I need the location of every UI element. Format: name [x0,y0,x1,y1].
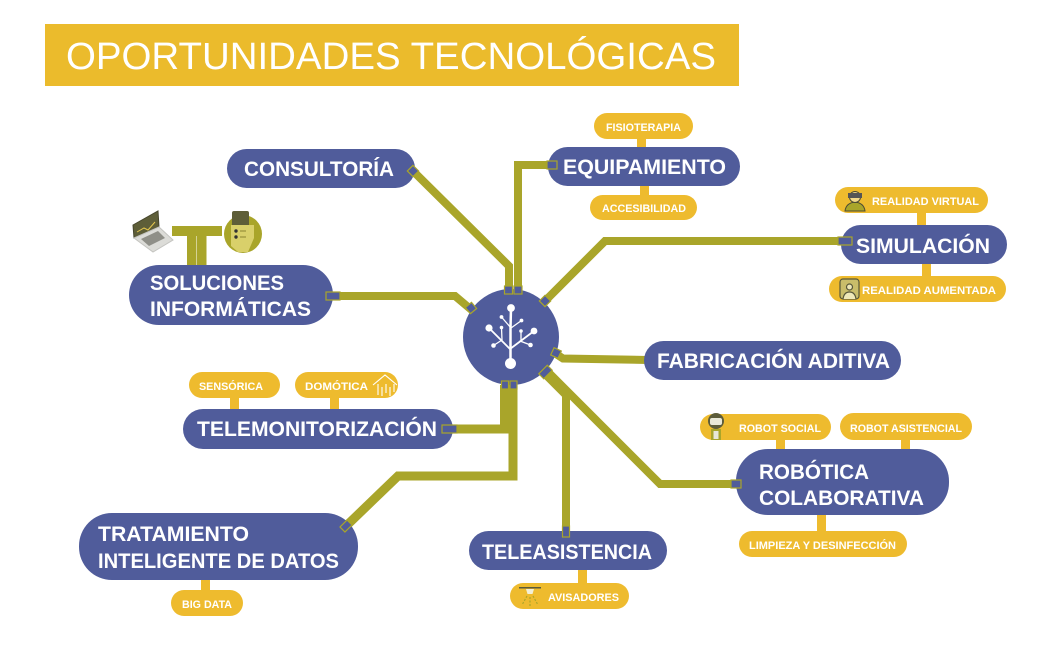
tag: realidad virtual [835,187,988,227]
tag: sensórica: SENSÓRICA [199,380,263,393]
node: equipamiento: EQUIPAMIENTO [563,156,726,179]
tag: avisadores: AVISADORES [548,592,619,604]
node: fabricación aditiva [644,341,901,380]
tag: realidad aumentada: REALIDAD AUMENTADA [862,285,996,297]
icon: phone checklist [224,211,262,253]
tag: robot asistencial: ROBOT ASISTENCIAL [850,423,962,435]
connector caps at central circle [465,286,561,389]
icon: ceiling sensor [519,587,541,606]
connector: telemonitorización [450,385,504,429]
node: equipamiento [547,113,740,220]
tag: big data: BIG DATA [182,599,232,611]
node: soluciones informáticas: INFORMÁTICAS [150,298,311,321]
node: teleasistencia [469,526,667,609]
connector: teleasistencia [543,372,566,535]
central circle with tree icon [463,289,559,385]
connector: simulación [543,241,845,303]
node: teleasistencia: TELEASISTENCIA [482,541,652,564]
title: OPORTUNIDADES TECNOLÓGICAS [66,35,716,78]
icon: robot [708,413,724,440]
tag: robot asistencial [840,413,972,451]
tag: limpieza y desinfección [739,512,907,557]
node: tratamiento inteligente de datos [79,513,358,616]
node: telemonitorización [183,372,457,449]
node: consultoría: CONSULTORÍA [244,158,394,181]
tag: realidad aumentada [829,262,1006,302]
node: simulación: SIMULACIÓN [856,234,990,258]
node: tratamiento inteligente de datos: INTELIGENTE DE DATOS [98,550,339,573]
tag: accesibilidad [590,185,697,220]
node: robótica colaborativa: ROBÓTICA [759,460,869,484]
node: tratamiento inteligente de datos: TRATAMIENTO [98,523,249,546]
connector: fabricación aditiva [553,352,648,360]
tag: robot social: ROBOT SOCIAL [739,423,821,435]
node: consultoría [227,149,419,188]
icon: laptop [133,211,173,252]
icon: VR headset person [845,192,865,211]
tag: sensórica [189,372,280,411]
node: robótica colaborativa [700,413,972,557]
node: soluciones informáticas [129,211,340,325]
tag: avisadores [510,568,629,609]
connector: robótica colaborativa [547,371,740,484]
tag: big data [171,577,243,616]
tag: fisioterapia: FISIOTERAPIA [606,122,681,134]
title [45,24,739,86]
icon: augmented reality [840,279,859,299]
tag: fisioterapia [594,113,693,149]
tag: realidad virtual: REALIDAD VIRTUAL [872,196,979,208]
node: soluciones informáticas: SOLUCIONES [150,272,284,295]
connector: equipamiento [518,165,552,292]
connector: tratamiento de datos [343,385,513,529]
node: simulación [829,187,1007,302]
connector: soluciones informáticas [333,296,474,312]
tag: robot social [700,413,831,451]
icon: smart home [373,375,397,396]
tag: domótica [295,372,398,411]
node: telemonitorización: TELEMONITORIZACIÓN [197,417,437,441]
node: robótica colaborativa: COLABORATIVA [759,487,924,510]
connector: consultoría [412,170,509,292]
tag: limpieza y desinfección: LIMPIEZA Y DESINFECCIÓN [749,539,896,552]
tag: accesibilidad: ACCESIBILIDAD [602,203,686,215]
branch to icons [172,226,222,272]
tag: domótica: DOMÓTICA [305,380,368,393]
node: fabricación aditiva: FABRICACIÓN ADITIVA [657,349,890,373]
